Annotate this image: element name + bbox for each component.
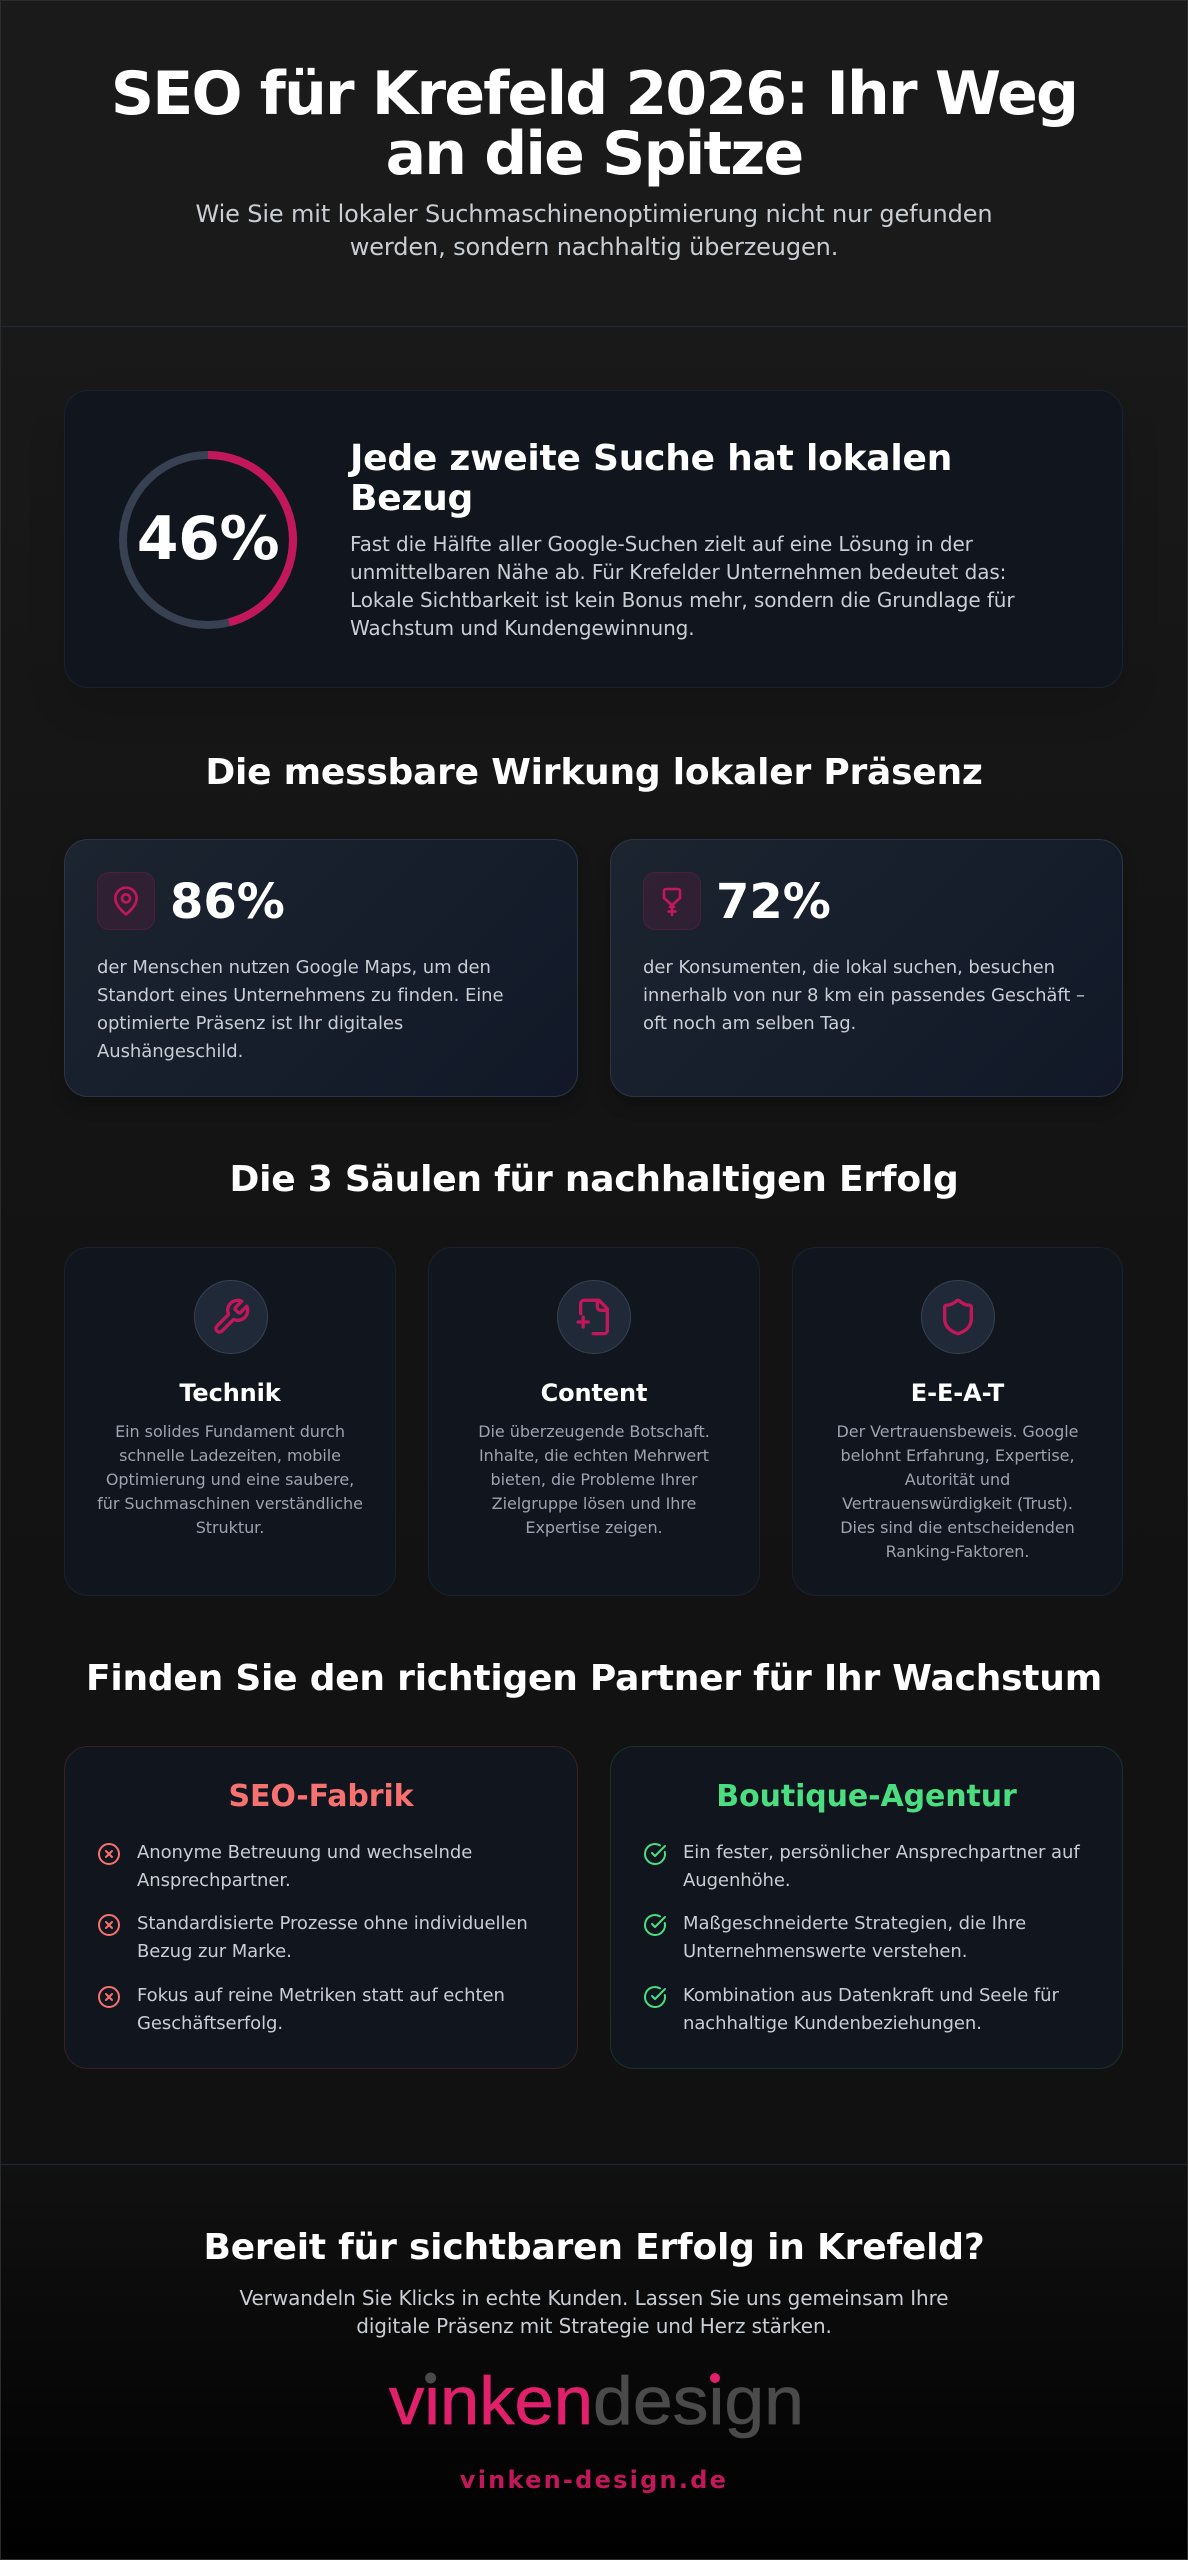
46 percent value: 46% [137, 504, 279, 574]
panel: stat 72% [610, 839, 1123, 1097]
icon: shield [921, 1280, 995, 1354]
title: SEO für Krefeld 2026: Ihr Weg [111, 59, 1077, 129]
list item 1 [644, 1842, 1080, 1891]
text: Aushängeschild. [97, 1041, 243, 1062]
item text [137, 1842, 472, 1891]
title: an die Spitze [386, 119, 802, 189]
panel: Boutique-Agentur [610, 1746, 1123, 2069]
pillar text: Ranking-Faktoren. [886, 1542, 1029, 1561]
item text: Maßgeschneiderte Strategien, die Ihre [683, 1913, 1026, 1934]
icon: store pin [643, 872, 701, 930]
list item 1 [98, 1842, 472, 1891]
item text: Bezug zur Marke. [137, 1941, 292, 1962]
logo: vinkendesign: design [593, 2363, 804, 2439]
pillar text [97, 1422, 363, 1537]
highlight heading [348, 438, 952, 519]
icon: x circle [98, 1843, 120, 1865]
pillar text: für Suchmaschinen verständliche [97, 1494, 363, 1513]
list item 3 [644, 1985, 1059, 2034]
pillar text: belohnt Erfahrung, Expertise, [840, 1446, 1075, 1465]
highlight text: Wachstum und Kundengewinnung. [350, 616, 695, 640]
panel: E-E-A-T [792, 1247, 1123, 1596]
pillar text: Vertrauenswürdigkeit (Trust). [842, 1494, 1073, 1513]
pillar text: Inhalte, die echten Mehrwert [479, 1446, 709, 1465]
logo: vinkendesign [388, 2363, 804, 2439]
subtitle [196, 200, 992, 261]
item text: Anonyme Betreuung und wechselnde [137, 1842, 472, 1863]
list item 2 [98, 1913, 528, 1962]
text [643, 957, 1085, 1034]
item text: Augenhöhe. [683, 1870, 791, 1891]
panel: Technik [64, 1247, 396, 1596]
heading: Wirkung: Die messbare Wirkung lokaler Präsenz [205, 752, 983, 793]
heading: Partner: Finden Sie den richtigen Partner für Ihr Wachstum [86, 1658, 1102, 1699]
subtitle: werden, sondern nachhaltig überzeugen. [350, 233, 838, 261]
item text: Geschäftserfolg. [137, 2013, 283, 2034]
pillar title: Technik [179, 1379, 281, 1407]
highlight heading: Bezug [350, 478, 473, 519]
pillar text: Dies sind die entscheidenden [840, 1518, 1075, 1537]
icon: x circle [98, 1986, 120, 2008]
pillar title: E-E-A-T [911, 1379, 1004, 1407]
value 86%: 86% [170, 874, 285, 930]
text [97, 957, 504, 1062]
icon: check circle [644, 1914, 666, 1936]
pillar text: Optimierung und eine saubere, [106, 1470, 354, 1489]
text: optimierte Präsenz ist Ihr digitales [97, 1013, 403, 1034]
icon: file plus [557, 1280, 631, 1354]
item text [683, 1842, 1080, 1891]
item text: Unternehmenswerte verstehen. [683, 1941, 967, 1962]
text: innerhalb von nur 8 km ein passendes Geschäft – [643, 985, 1085, 1006]
main background [0, 327, 1188, 2164]
footer text: Verwandeln Sie Klicks in echte Kunden. Lassen Sie uns gemeinsam Ihre [240, 2286, 948, 2310]
title [111, 59, 1077, 189]
item text [137, 1913, 528, 1962]
highlight text: Fast die Hälfte aller Google-Suchen zielt auf eine Lösung in der [350, 532, 973, 556]
footer text [240, 2286, 948, 2338]
highlight text: unmittelbaren Nähe ab. Für Krefelder Unternehmen bedeutet das: [350, 560, 1006, 584]
panel: Content [428, 1247, 760, 1596]
list item 2 [644, 1913, 1026, 1962]
donut chart: 46% [119, 451, 297, 629]
list item 3 [98, 1985, 505, 2034]
text: oft noch am selben Tag. [643, 1013, 856, 1034]
pillar text: Struktur. [196, 1518, 264, 1537]
item text [683, 1985, 1059, 2034]
pillar text [836, 1422, 1078, 1561]
pillar text: schnelle Ladezeiten, mobile [119, 1446, 341, 1465]
value 72%: 72% [716, 874, 831, 930]
icon: check circle [644, 1986, 666, 2008]
pillar text [478, 1422, 710, 1537]
pillar text: Ein solides Fundament durch [115, 1422, 345, 1441]
highlight text: Lokale Sichtbarkeit ist kein Bonus mehr, sondern die Grundlage für [350, 588, 1014, 612]
footer background [0, 2164, 1188, 2560]
heading: Säulen: Die 3 Säulen für nachhaltigen Erfolg [229, 1159, 959, 1200]
icon: map pin [97, 872, 155, 930]
pillar text: Der Vertrauensbeweis. Google [836, 1422, 1078, 1441]
icon: check circle [644, 1843, 666, 1865]
text: Standort eines Unternehmens zu finden. Eine [97, 985, 504, 1006]
text: der Menschen nutzen Google Maps, um den [97, 957, 491, 978]
item text: Standardisierte Prozesse ohne individuellen [137, 1913, 528, 1934]
item text: nachhaltige Kundenbeziehungen. [683, 2013, 982, 2034]
item text: Fokus auf reine Metriken statt auf echten [137, 1985, 505, 2006]
pillar text: bieten, die Probleme Ihrer [491, 1470, 697, 1489]
logo: vinkendesign: vinken [389, 2363, 593, 2439]
website link: vinken-design.de [460, 2466, 728, 2494]
pillar text: Zielgruppe lösen und Ihre [492, 1494, 696, 1513]
highlight text [350, 532, 1015, 640]
item text [137, 1985, 505, 2034]
footer text: digitale Präsenz mit Strategie und Herz stärken. [356, 2314, 832, 2338]
pillar text: Die überzeugende Botschaft. [478, 1422, 710, 1441]
icon: wrench [194, 1280, 268, 1354]
item text: Ansprechpartner. [137, 1870, 291, 1891]
panel: 46 percent highlight [64, 390, 1123, 688]
item text: Kombination aus Datenkraft und Seele für [683, 1985, 1059, 2006]
footer heading: Bereit für sichtbaren Erfolg in Krefeld? [203, 2227, 985, 2268]
item text [683, 1913, 1026, 1962]
subtitle: Wie Sie mit lokaler Suchmaschinenoptimierung nicht nur gefunden [196, 200, 992, 228]
header band [0, 0, 1188, 327]
pillar text: Expertise zeigen. [525, 1518, 663, 1537]
item text: Ein fester, persönlicher Ansprechpartner auf [683, 1842, 1080, 1863]
highlight heading: Jede zweite Suche hat lokalen [350, 438, 952, 479]
panel: SEO-Fabrik [64, 1746, 578, 2069]
text: der Konsumenten, die lokal suchen, besuchen [643, 957, 1055, 978]
pillar text: Autorität und [905, 1470, 1010, 1489]
pillar title: Content [541, 1379, 647, 1407]
panel title: Boutique-Agentur [716, 1779, 1017, 1814]
icon: x circle [98, 1914, 120, 1936]
panel title: SEO-Fabrik [228, 1779, 414, 1814]
panel: stat 86% [64, 839, 578, 1097]
